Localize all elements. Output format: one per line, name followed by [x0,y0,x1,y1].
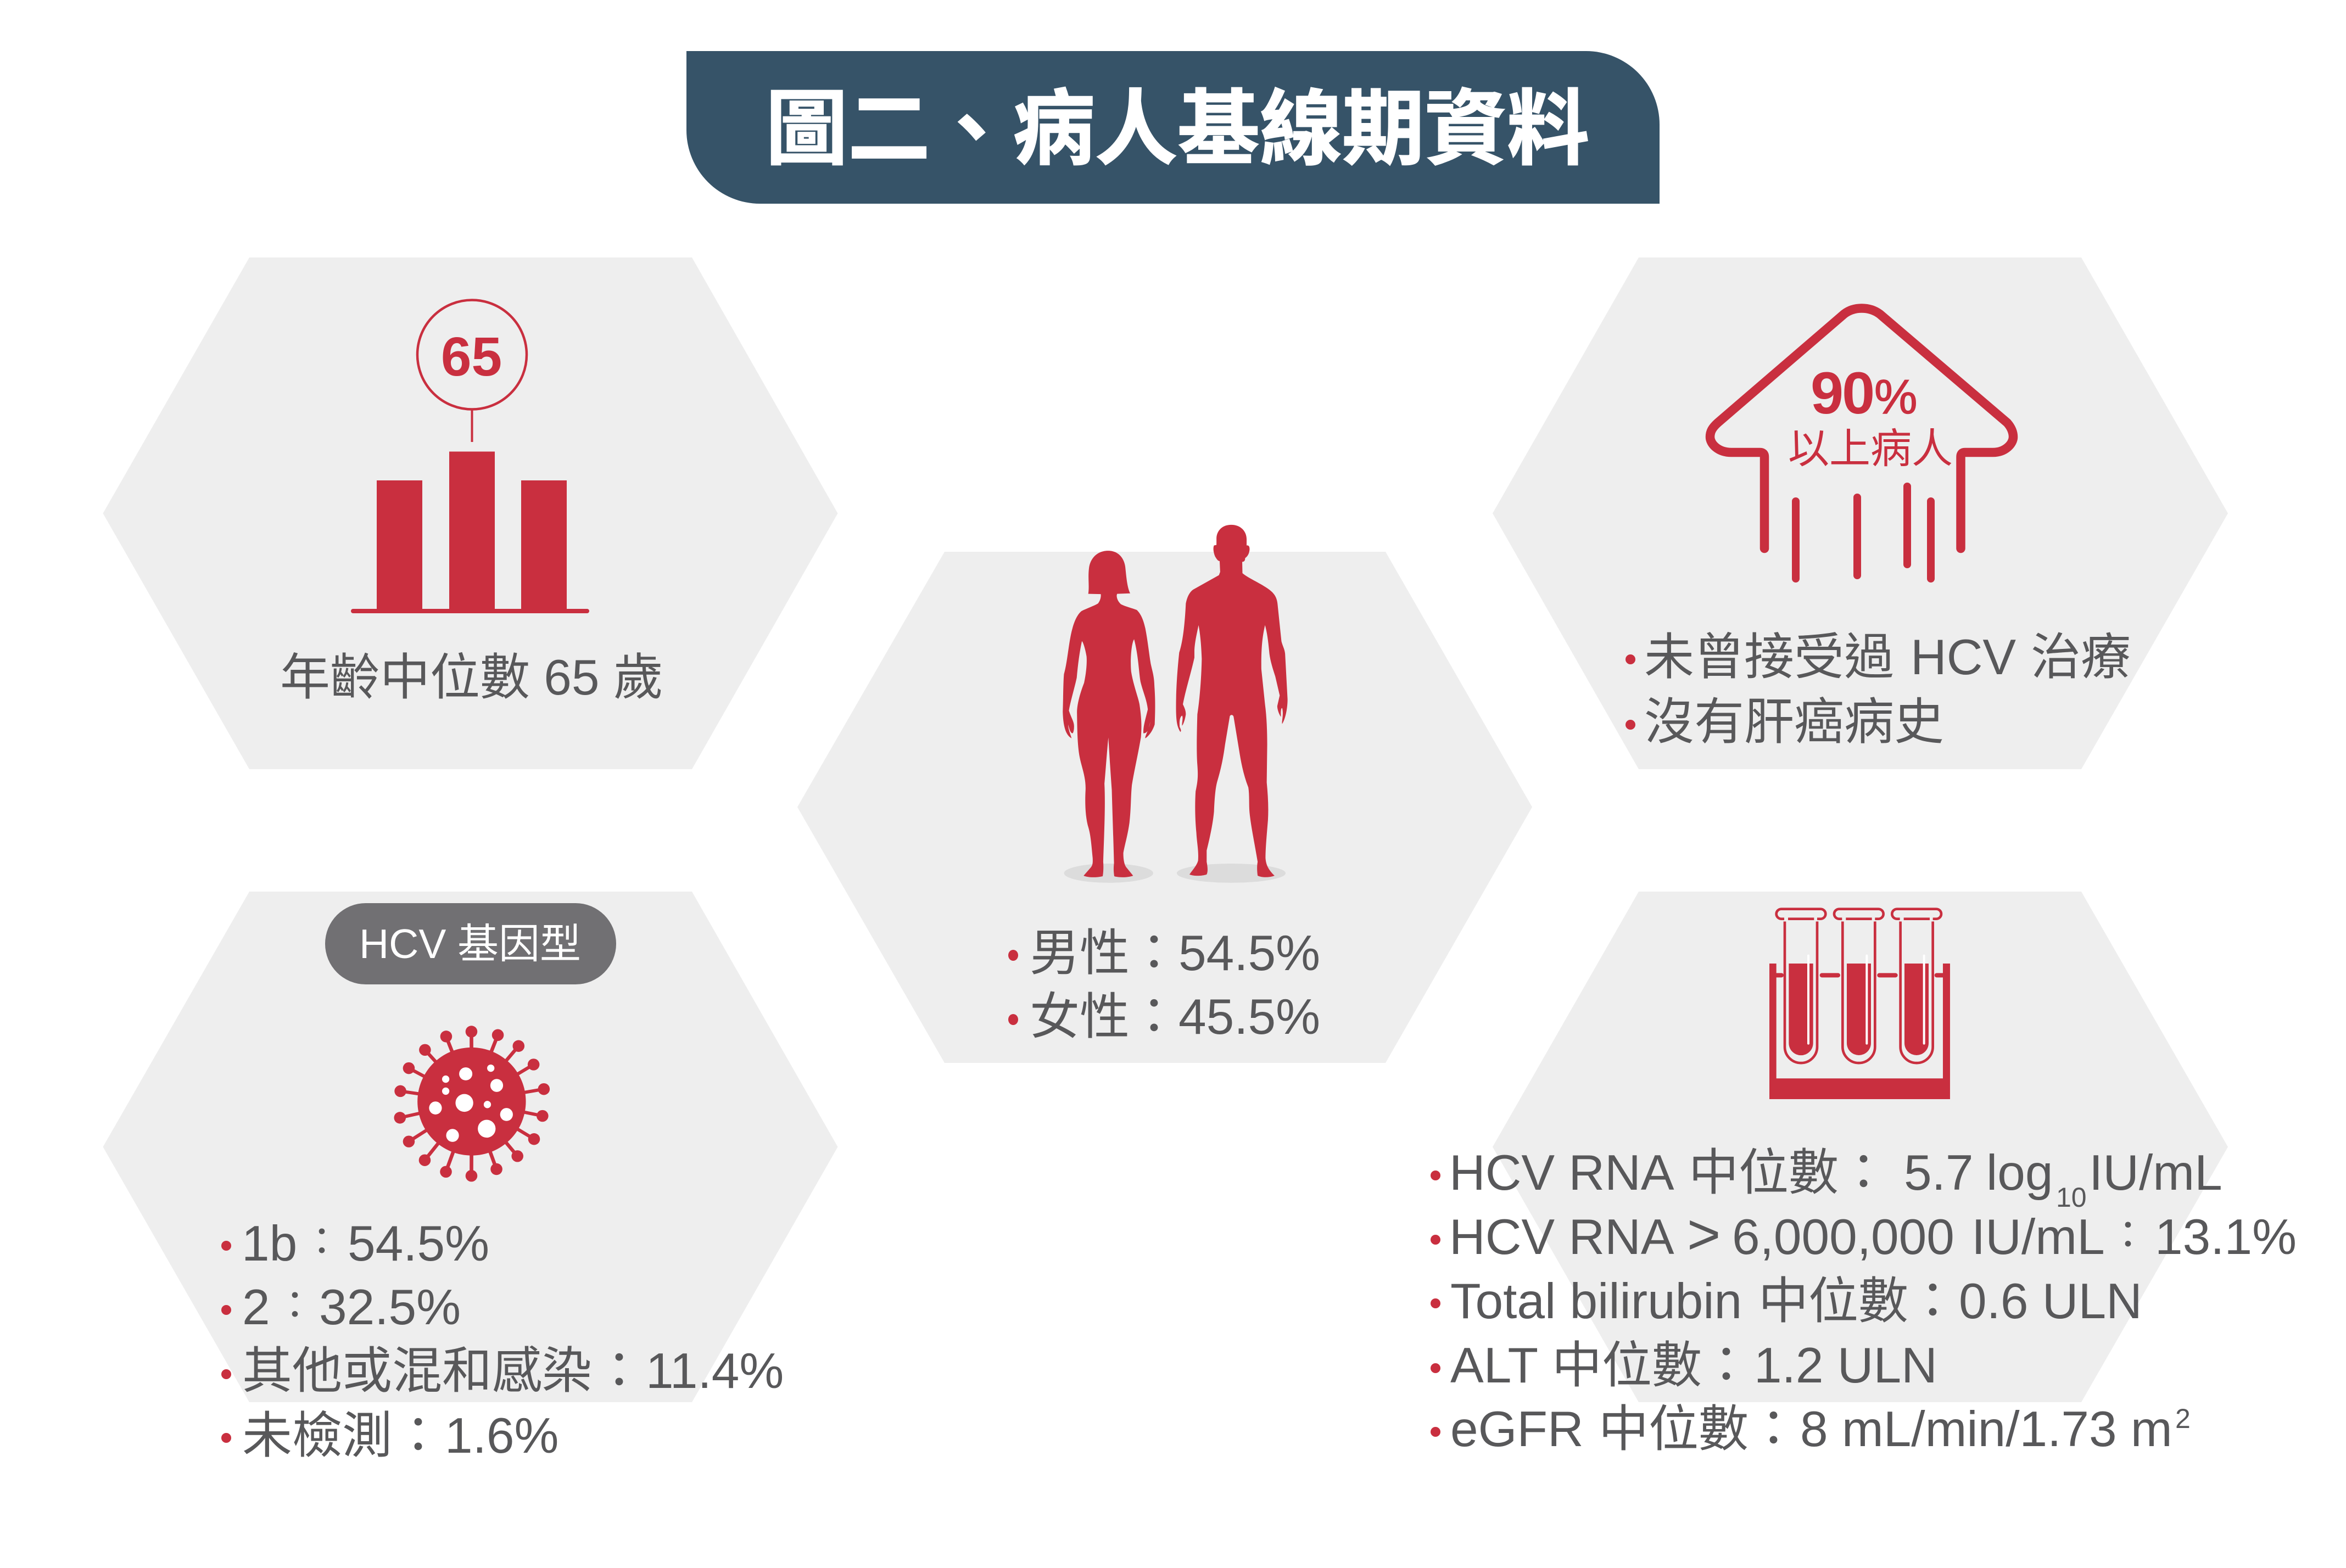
icon: bar chart with 65 pin [351,300,589,613]
lab values list: ： [1701,1338,1751,1393]
treatment history list: 未曾接受過 [1644,630,1894,685]
sex distribution list [1008,926,1320,1045]
lab values list: 中位數 [1758,1274,1908,1329]
lab values list: 中位數 [1689,1145,1839,1201]
genotype list: 54.5% [348,1216,489,1272]
title text: 圖二、病人基線期資料 [766,83,1589,175]
genotype list: 32.5% [319,1280,461,1335]
lab values list: ： [2109,1214,2147,1257]
lab values list: 1.2 ULN [1754,1338,1937,1393]
genotype list: 其他或混和感染 [242,1343,592,1399]
icon: upward arrow 90% [1710,309,2013,579]
panel: sex distribution [797,525,1532,1063]
panel: treatment history [1493,257,2228,769]
lab values list: ： [1839,1145,1889,1201]
panel: lab values [1431,892,2297,1457]
lab values list: IU/mL [2089,1145,2222,1201]
lab values list: Total bilirubin [1450,1274,1742,1329]
lab values list: 中位數 [1552,1338,1702,1393]
lab values list: 13.1% [2155,1209,2297,1265]
lab values list: 6,000,000 [1732,1209,1954,1265]
sex distribution list: ： [1129,926,1179,981]
treatment history list [1626,630,2131,750]
lab values list: > [1687,1202,1721,1267]
lab values list: HCV RNA [1449,1145,1674,1201]
genotype list: ： [594,1343,644,1399]
genotype pill heading: 基因型 [457,921,581,967]
treatment history list: 沒有肝癌病史 [1644,695,1944,750]
sex distribution list: 54.5% [1178,926,1320,981]
lab values list: log [1986,1145,2053,1201]
lab values list: 2 [2175,1403,2191,1434]
icon: bar chart with 65 pin: 65 [441,326,502,388]
lab values list: eGFR [1450,1402,1584,1457]
lab values list: ALT [1450,1338,1538,1393]
lab values list: ： [1908,1274,1958,1329]
lab values list: 5.7 [1904,1145,1974,1201]
genotype pill heading [325,903,616,984]
sex distribution list: 女性 [1030,989,1130,1045]
icon: upward arrow 90%: 90% [1811,360,1916,426]
sex distribution list: 45.5% [1178,989,1320,1045]
lab values list [1431,1145,2297,1457]
icon: upward arrow 90%: 以上病人 [1788,425,1953,472]
lab values list: 0.6 ULN [1959,1274,2142,1329]
icon: blood test tubes in rack [1769,909,1950,1099]
sex distribution list: ： [1129,989,1179,1045]
panel: median age [103,257,838,769]
genotype list: 11.4% [646,1343,784,1399]
genotype list: 未檢測 [242,1408,392,1464]
genotype list: 1.6% [445,1408,558,1464]
age caption: 年齡中位數 65 歲 [280,650,663,705]
treatment history list: HCV [1911,630,2016,685]
sex distribution list: 男性 [1030,926,1130,981]
genotype list: 2 [242,1280,270,1335]
genotype list: 1b [242,1216,297,1272]
treatment history list: 治療 [2031,630,2131,685]
title banner [686,51,1660,204]
lab values list: 10 [2056,1182,2087,1213]
genotype list: ： [393,1408,443,1464]
genotype list [221,1216,784,1464]
lab values list: 8 mL/min/1.73 m [1800,1402,2172,1457]
lab values list: IU/mL [1971,1209,2105,1265]
genotype list: ： [276,1284,314,1327]
genotype list: ： [303,1220,341,1263]
icon: virus [394,1026,550,1181]
panel: HCV genotype [103,892,838,1464]
icon: woman and man silhouettes [1063,525,1288,883]
genotype pill heading: HCV [359,921,446,967]
lab values list: 中位數 [1599,1402,1749,1457]
lab values list: ： [1749,1402,1798,1457]
lab values list: HCV RNA [1449,1209,1674,1265]
